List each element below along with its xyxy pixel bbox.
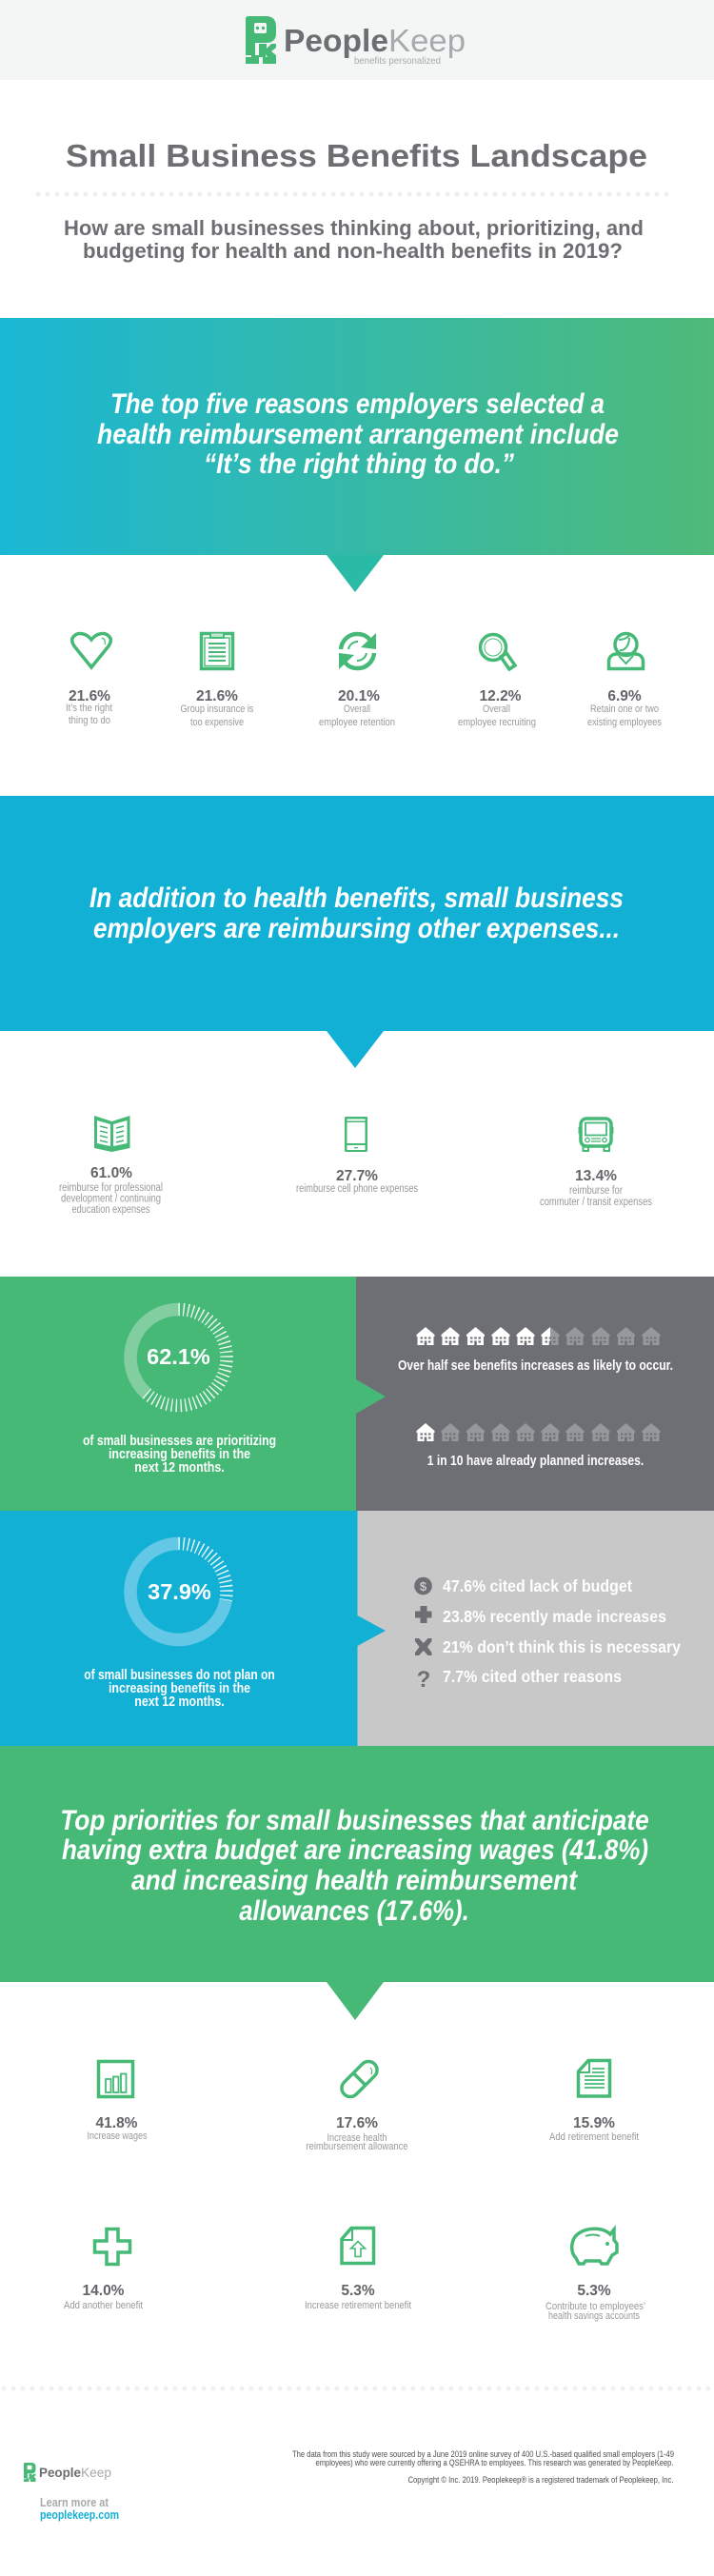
icon: refresh arrows [339,633,376,669]
stat: 21.6% insurance: too expensive [190,717,244,728]
list item: other reasons: ? [417,1667,430,1693]
banner heading [89,882,624,944]
text: 1 in 10: 1 in 10 have already planned increases. [427,1454,644,1469]
banner heading: “It’s the right thing to do.” [204,448,514,480]
panel caption: of small businesses do not plan on [84,1668,275,1683]
stat: 5.3% savings accounts: health savings accounts [548,2310,640,2322]
call to action: Learn more at [40,2495,109,2509]
list item: not necessary: 21% don’t think this is necessary [443,1637,681,1656]
list item: other reasons: 7.7% cited other reasons [443,1667,622,1686]
icon: document with up arrow [342,2228,373,2264]
stat: 14.0% another benefit: 14.0% [83,2283,125,2299]
panel caption: increasing benefits in the [109,1447,250,1462]
stat: 61.0% education: reimburse for professional [59,1182,163,1194]
icon: heart [72,634,110,667]
stat: 21.6% insurance [181,688,254,728]
call to action [40,2495,119,2522]
stat: 61.0% education: 61.0% [90,1165,132,1181]
source note [292,2449,674,2485]
stat: 15.9% retirement: 15.9% [573,2115,615,2131]
stat: 14.0% another benefit [64,2283,143,2311]
panel: other expenses banner [0,796,714,1068]
banner heading: allowances (17.6%). [239,1895,469,1927]
list item: lack of budget: 47.6% cited lack of budget [443,1576,632,1595]
stat: 61.0% education: education expenses [72,1204,150,1216]
stat: 17.6% allowance: reimbursement allowance [307,2141,407,2152]
icon: person [609,634,644,668]
stat: 41.8% wages: 41.8% [96,2115,138,2131]
stat: 15.9% retirement: Add retirement benefit [549,2131,639,2143]
icon: book [94,1116,129,1152]
list item: other reasons [417,1667,622,1693]
logo wordmark: benefits personalized [354,55,441,67]
title: Small Business Benefits Landscape [66,138,647,173]
stat: 13.4% commuter: 13.4% [575,1168,617,1184]
panel caption [84,1668,275,1710]
stat: 27.7% cell phone [296,1168,418,1195]
stat: 21.6% right thing: It’s the right [66,703,112,714]
panel caption: of small businesses are prioritizing [83,1434,276,1449]
arrow: blue pointer [358,1615,386,1646]
list item: recent increases: 23.8% recently made increases [443,1607,666,1626]
banner heading: The top five reasons employers selected a [110,388,605,420]
footer logo [24,2463,111,2482]
donut chart: 37.9%: 37.9% [148,1579,211,1604]
source note: Copyright © Inc. 2019. Peoplekeep® is a registered trademark of Peoplekeep, Inc. [407,2475,674,2485]
panel: reimbursed expenses row [59,1116,652,1216]
stat: 12.2% recruiting: 12.2% [480,688,522,704]
stat: 21.6% right thing: 21.6% [69,688,110,704]
header bar with logo [0,0,714,80]
icon: bar chart [99,2062,133,2096]
stat: 13.4% commuter [540,1168,652,1208]
donut chart: 37.9% [130,1544,227,1639]
icon: phone [345,1117,367,1152]
logo wordmark: People [284,23,388,58]
panel: reasons icon row [66,632,662,728]
stat: 17.6% allowance [307,2115,407,2152]
panel: prioritizing increases (green) [0,1277,356,1511]
banner heading: and increasing health reimbursement [131,1865,579,1896]
banner heading [60,1805,649,1927]
stat: 14.0% another benefit: Add another benefit [64,2300,143,2311]
icon row: houses over half [417,1327,661,1345]
stat: 20.1% retention [319,688,395,728]
icon: clipboard [202,632,232,668]
icon: PeopleKeep logo mark [246,16,276,64]
stat: 12.2% recruiting: Overall [483,703,510,715]
stat: 6.9% retain: 6.9% [607,688,642,704]
list item: lack of budget: $ [420,1579,427,1594]
stat: 41.8% wages: Increase wages [88,2130,148,2142]
logo wordmark [284,23,466,67]
stat: 17.6% allowance: Increase health [327,2132,387,2144]
banner heading: employers are reimbursing other expenses... [93,913,620,944]
banner heading: In addition to health benefits, small business [89,882,624,914]
panel: reasons not to increase (light grey) [358,1511,714,1746]
stat: 5.3% increase retirement [305,2283,411,2311]
icon: pill [338,2058,381,2100]
stat: 41.8% wages [88,2115,148,2142]
panel caption: next 12 months. [134,1694,225,1710]
stat: 27.7% cell phone: 27.7% [336,1168,378,1184]
banner heading [97,388,619,480]
panel caption [83,1434,276,1476]
icon: small logo mark [24,2463,35,2482]
icon: piggy bank [572,2229,617,2264]
stat: 5.3% savings accounts: 5.3% [577,2283,611,2299]
stat: 27.7% cell phone: reimburse cell phone expenses [296,1183,418,1195]
panel: top five reasons banner [0,318,714,592]
stat: 17.6% allowance: 17.6% [336,2115,378,2131]
icon row: houses 1 in 10 [417,1423,661,1441]
stat: 6.9% retain: existing employees [587,717,662,728]
footer logo: People [39,2465,81,2480]
footer logo: Keep [81,2465,111,2480]
stat: 21.6% insurance: Group insurance is [181,703,254,715]
stat: 5.3% increase retirement: Increase retirement benefit [305,2300,411,2311]
stat: 5.3% increase retirement: 5.3% [341,2283,375,2299]
banner heading: health reimbursement arrangement include [97,419,619,450]
stat: 13.4% commuter: commuter / transit expenses [540,1197,652,1208]
stat: 6.9% retain [587,688,662,728]
stat: 20.1% retention: employee retention [319,717,395,728]
stat: 6.9% retain: Retain one or two [590,703,659,715]
panel: priorities icon grid [64,2058,645,2322]
panel: not planning increases (blue) [0,1511,358,1746]
panel caption: next 12 months. [134,1460,225,1476]
stat: 15.9% retirement [549,2115,639,2143]
stat: 21.6% insurance: 21.6% [196,688,238,704]
logo wordmark: Keep [388,23,466,58]
stat: 12.2% recruiting: employee recruiting [458,717,536,728]
stat: 20.1% retention: 20.1% [338,688,380,704]
donut chart: 62.1%: 62.1% [147,1344,210,1369]
icon: document [579,2060,609,2096]
stat: 21.6% right thing [66,688,112,726]
stat: 20.1% retention: Overall [344,703,370,715]
panel: likelihood of increases (dark grey) [356,1277,714,1511]
subtitle [64,216,644,263]
stat: 61.0% education [59,1165,163,1216]
icon: bus [579,1119,613,1151]
icon: magnifying glass [480,634,515,669]
banner heading: Top priorities for small businesses that anticipate [60,1805,649,1836]
subtitle: How are small businesses thinking about, prioritizing, and [64,216,644,240]
icon: medical plus [95,2229,129,2264]
panel caption: increasing benefits in the [109,1681,250,1696]
stat: 5.3% savings accounts: Contribute to employees’ [545,2301,645,2312]
stat: 13.4% commuter: reimburse for [569,1185,623,1197]
subtitle: budgeting for health and non-health benefits in 2019? [83,239,623,263]
panel: top priorities banner [0,1746,714,2020]
donut chart: 62.1% [130,1310,227,1405]
stat: 21.6% right thing: thing to do [69,715,110,726]
stat: 12.2% recruiting [458,688,536,728]
stat: 5.3% savings accounts [545,2283,645,2322]
stat: 61.0% education: development / continuing [61,1194,161,1205]
arrow: green pointer [356,1379,386,1414]
call to action: peoplekeep.com [40,2507,119,2522]
